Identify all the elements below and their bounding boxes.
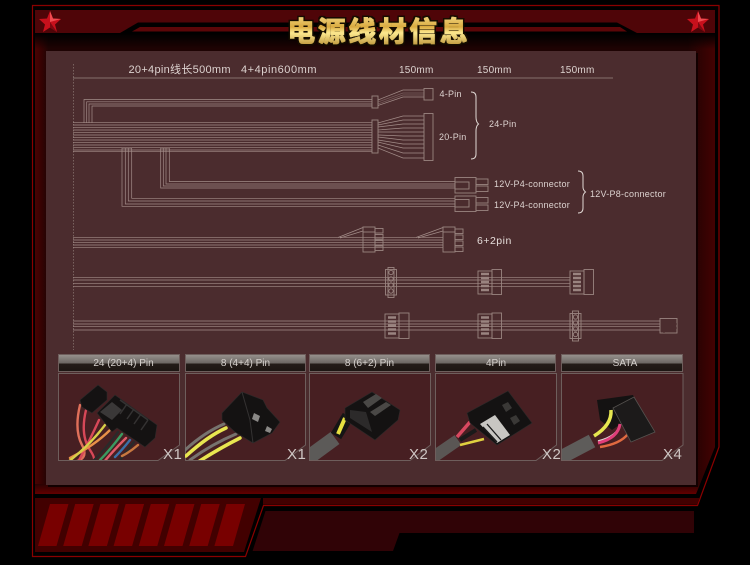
labels: pin names: 12V-P8-connector: [590, 189, 666, 199]
cable: 4-pin branch: [84, 88, 433, 123]
brace: 12V P8: [578, 171, 586, 213]
quantity: X2: [409, 446, 428, 463]
labels: pin names: 12V-P4-connector: [494, 179, 570, 189]
photo: molex connector: [432, 391, 532, 458]
card body: [436, 374, 556, 460]
card header: 8 (6+2) Pin: [345, 358, 394, 369]
connector: SATA middle: [478, 270, 502, 294]
labels: pin names: 12V-P4-connector: [494, 200, 570, 210]
card: 8 (4+4) Pin: [185, 354, 306, 463]
photo: PCI-E connector: [305, 392, 400, 460]
length ruler: [73, 64, 613, 350]
card: 8 (6+2) Pin: [305, 354, 430, 463]
card header: 4Pin: [486, 358, 506, 369]
text: cable length: 4+4pin600mm: [241, 64, 317, 76]
card body: [58, 374, 180, 460]
card body: [310, 374, 430, 460]
photo: SATA connector: [556, 395, 655, 460]
quantity: X1: [163, 446, 182, 463]
labels: pin names: 20-Pin: [439, 132, 467, 142]
card: 24 (20+4) Pin: [58, 354, 182, 463]
quantity: X4: [663, 446, 682, 463]
text: segment lengths: [399, 65, 595, 76]
labels: pin names: 4-Pin: [440, 89, 462, 99]
footer dark block: [253, 511, 694, 551]
stripes: [38, 504, 245, 546]
cable: peripheral row one: [73, 268, 594, 298]
panel: main: [46, 51, 698, 487]
footer band: [263, 498, 700, 504]
connector: lower P4: [455, 196, 488, 212]
card body: [562, 374, 683, 460]
cable: 24-pin main bundle: [73, 114, 433, 160]
quantity: X2: [542, 446, 561, 463]
brace: 24-pin: [471, 92, 478, 159]
connector: molex: [570, 311, 581, 341]
text: segment lengths: 150mm: [560, 65, 595, 76]
header band: [35, 10, 715, 33]
cable: peripheral row two: [73, 311, 677, 341]
card header: SATA: [613, 358, 638, 369]
text: cable length: 20+4pin线长500mm: [128, 62, 231, 76]
card header: 24 (20+4) Pin: [93, 358, 154, 369]
card body: [186, 374, 306, 460]
connector: upper P4: [455, 178, 488, 193]
photo: 8-pin connector: [185, 392, 280, 462]
icon: left star: [39, 11, 61, 32]
title: 电源线材信息: [288, 9, 470, 49]
photo: 24-pin connector: [68, 385, 157, 462]
footer left block: [35, 498, 261, 552]
card header: 8 (4+4) Pin: [221, 358, 270, 369]
connector: small end: [660, 318, 677, 333]
connector: molex: [386, 268, 396, 298]
connector: SATA first: [385, 313, 409, 338]
card: SATA: [556, 354, 683, 463]
connector: SATA end: [570, 270, 594, 294]
connector: SATA second: [478, 313, 502, 338]
icon: right star: [687, 11, 709, 32]
connector: first 6+2: [363, 227, 383, 252]
card: 4Pin: [432, 354, 561, 463]
text: segment lengths: 150mm: [477, 65, 512, 76]
cable: 12V P4 connectors: [122, 148, 488, 212]
text: segment lengths: 150mm: [399, 65, 434, 76]
quantity: X1: [287, 446, 306, 463]
labels: pin names: 6+2pin: [477, 235, 512, 247]
connector: second 6+2: [443, 227, 463, 252]
cable: 6+2 pin: [73, 227, 463, 252]
frame interior: [35, 33, 715, 494]
labels: pin names: [439, 89, 666, 247]
labels: pin names: 24-Pin: [489, 119, 517, 129]
